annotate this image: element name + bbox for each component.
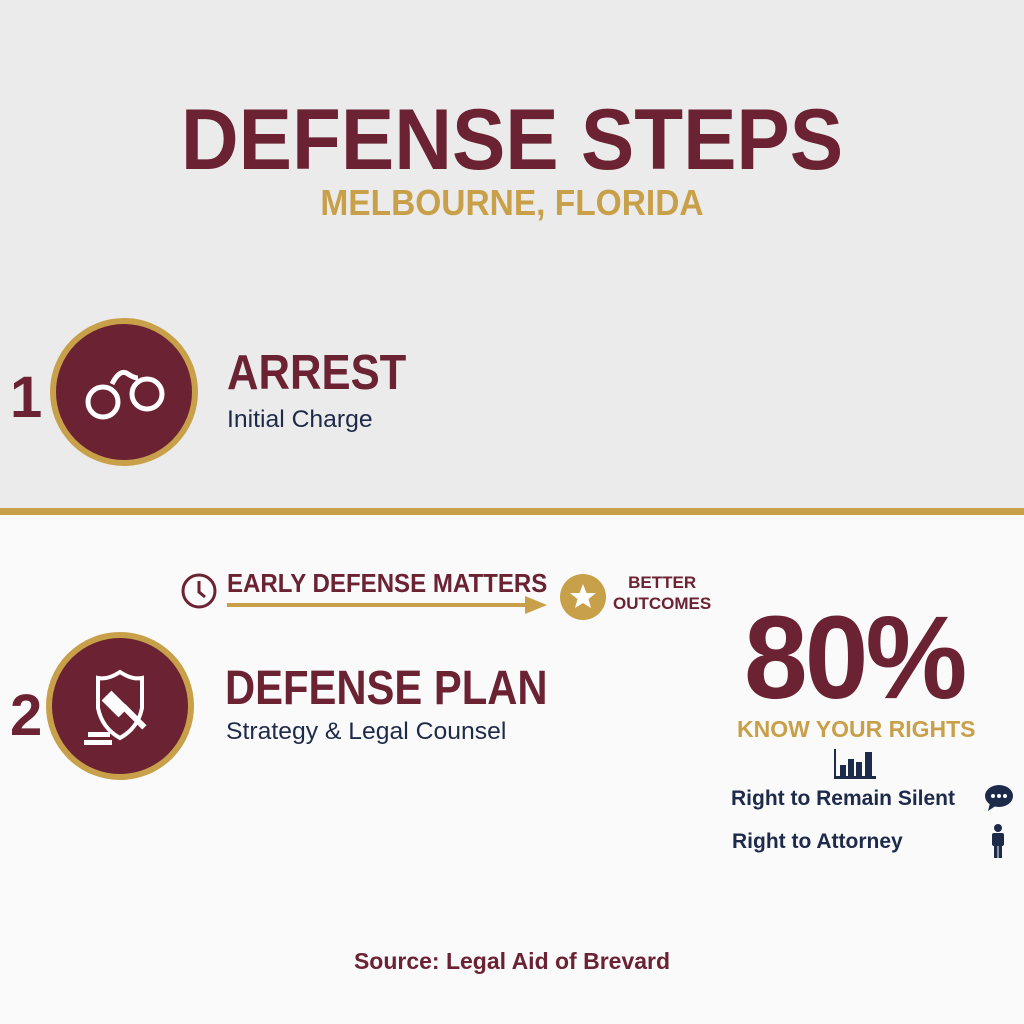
- icon: person: [992, 824, 1004, 858]
- icon: clock: [182, 574, 216, 608]
- title: DEFENSE STEPS: [181, 92, 843, 188]
- step 1 icon: handcuffs: [50, 318, 198, 466]
- subtitle: MELBOURNE, FLORIDA: [320, 182, 704, 223]
- right 2 text: Right to Attorney: [732, 830, 903, 853]
- step 1 text: Initial Charge: [227, 406, 373, 433]
- better outcomes text: BETTER: [628, 573, 696, 592]
- know your rights label: KNOW YOUR RIGHTS: [737, 716, 976, 742]
- right 1 text: Right to Remain Silent: [731, 787, 955, 810]
- arrow: [227, 596, 547, 614]
- icon: bar chart: [834, 749, 876, 779]
- step 2 number: 2: [10, 683, 42, 748]
- icon: speech bubble: [985, 785, 1013, 811]
- step 2 icon: shield gavel: [46, 632, 194, 780]
- step 1 heading: ARREST: [227, 346, 406, 400]
- better outcomes text: OUTCOMES: [613, 594, 711, 613]
- step 2 text: Strategy & Legal Counsel: [226, 718, 506, 745]
- step 1 number: 1: [10, 365, 42, 430]
- divider gold line: [0, 508, 1024, 515]
- top panel background: [0, 0, 1024, 510]
- source: Source: Legal Aid of Brevard: [354, 948, 670, 974]
- better outcomes text: [613, 573, 711, 613]
- icon: star: [560, 574, 606, 620]
- step 2 heading: DEFENSE PLAN: [225, 662, 548, 715]
- stat 80%: 80%: [744, 592, 964, 724]
- early defense heading: EARLY DEFENSE MATTERS: [227, 568, 547, 598]
